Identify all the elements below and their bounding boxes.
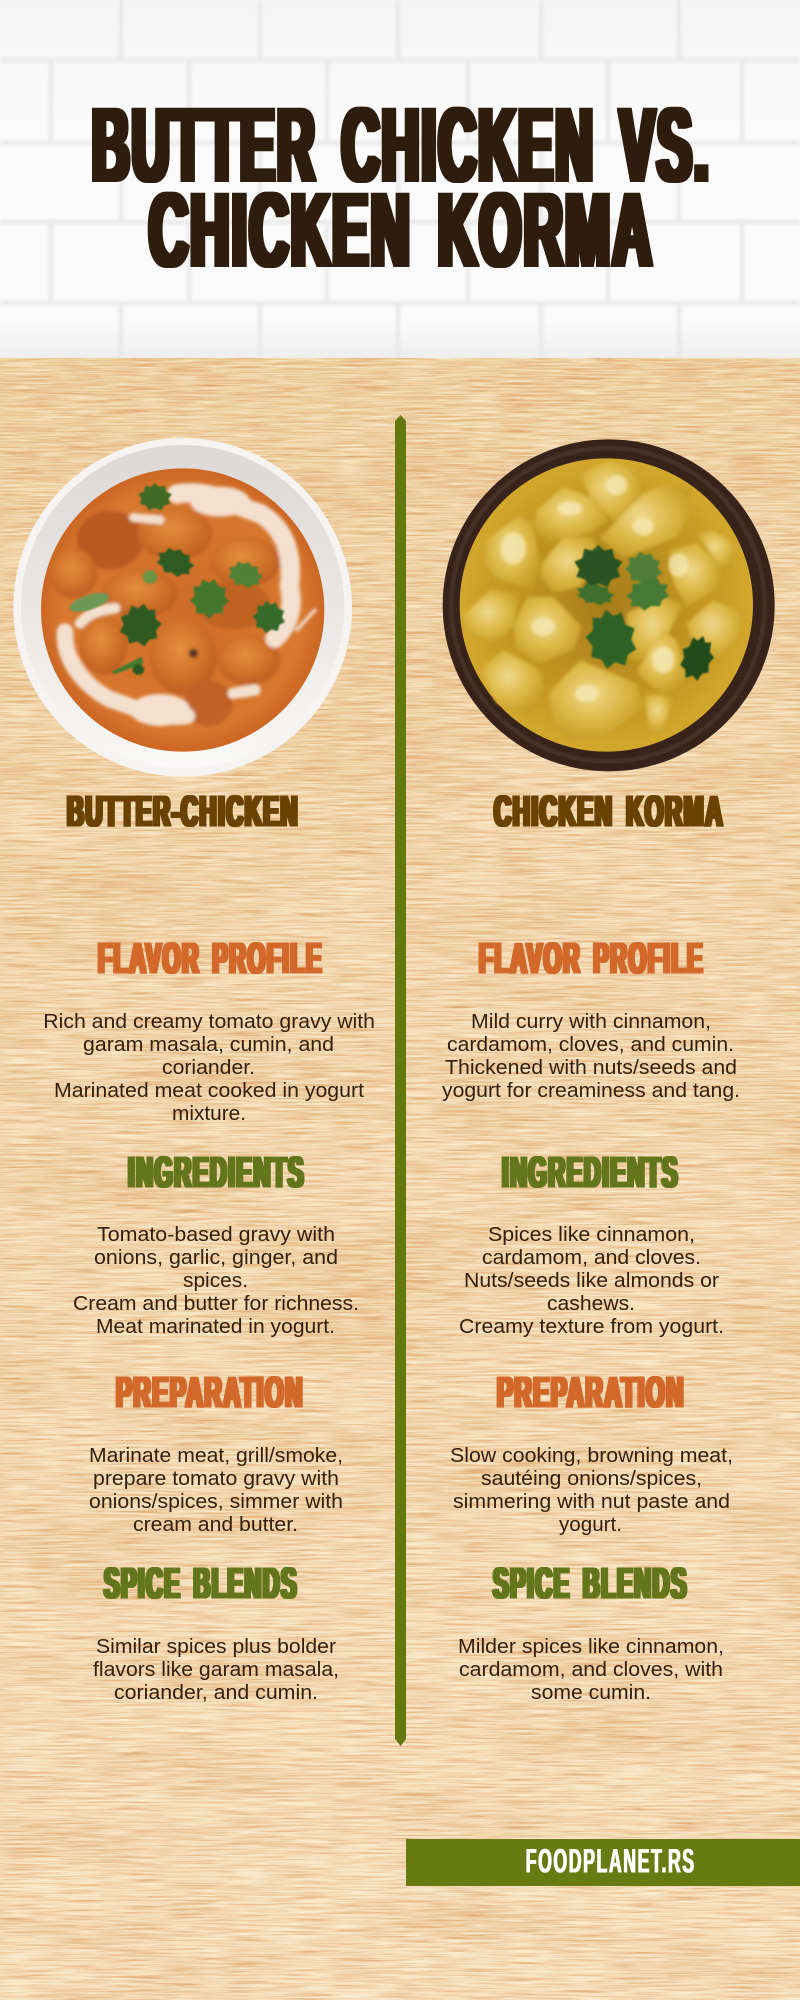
section: ingredients xyxy=(73,1148,359,1338)
section: ingredients: cashews. xyxy=(547,1293,635,1315)
section: preparation xyxy=(89,1368,343,1536)
section: preparation: yogurt. xyxy=(559,1514,622,1536)
section: spice blends: cardamom, and cloves, with xyxy=(459,1659,723,1681)
image: chicken korma bowl xyxy=(443,439,775,771)
section: flavor profile xyxy=(442,934,740,1102)
section: preparation: PREPARATION xyxy=(116,1368,304,1417)
section: preparation: simmering with nut paste and xyxy=(453,1491,730,1513)
image: butter chicken bowl xyxy=(13,438,352,777)
panel: chicken korma column xyxy=(442,439,775,1704)
section: spice blends: Similar spices plus bolder xyxy=(96,1636,336,1658)
section: ingredients: Creamy texture from yogurt. xyxy=(459,1316,724,1338)
section: spice blends: some cumin. xyxy=(531,1682,651,1704)
section: flavor profile: Rich and creamy tomato gravy with xyxy=(43,1011,375,1033)
section: flavor profile: Thickened with nuts/seeds and xyxy=(445,1057,737,1079)
section: flavor profile: FLAVOR PROFILE xyxy=(98,934,323,983)
section: preparation: onions/spices, simmer with xyxy=(89,1491,343,1513)
section: preparation: Slow cooking, browning meat, xyxy=(450,1445,733,1467)
heading: butter-chicken: BUTTER-CHICKEN xyxy=(67,787,299,836)
section: ingredients: Meat marinated in yogurt. xyxy=(96,1316,335,1338)
section: ingredients: Nuts/seeds like almonds or xyxy=(464,1270,719,1292)
section: flavor profile: garam masala, cumin, and xyxy=(83,1034,334,1056)
section: flavor profile: coriander. xyxy=(162,1057,255,1079)
centre divider bar xyxy=(395,415,406,1746)
section: spice blends: SPICE BLENDS xyxy=(104,1559,298,1608)
section: preparation: prepare tomato gravy with xyxy=(93,1468,339,1490)
section: spice blends xyxy=(93,1559,339,1704)
section: preparation: sautéing onions/spices, xyxy=(481,1468,702,1490)
section: ingredients xyxy=(459,1148,724,1338)
section: preparation xyxy=(450,1368,733,1536)
section: flavor profile: Mild curry with cinnamon, xyxy=(471,1011,711,1033)
section: preparation: cream and butter. xyxy=(133,1514,298,1536)
footer banner: foodplanet.rs xyxy=(406,1839,800,1886)
section: ingredients: Cream and butter for richness. xyxy=(73,1293,359,1315)
section: ingredients: Tomato-based gravy with xyxy=(97,1224,335,1246)
section: flavor profile xyxy=(43,934,375,1125)
section: spice blends: flavors like garam masala, xyxy=(93,1659,339,1681)
section: spice blends xyxy=(458,1559,724,1704)
section: flavor profile: mixture. xyxy=(172,1103,246,1125)
section: ingredients: onions, garlic, ginger, and xyxy=(94,1247,338,1269)
section: ingredients: INGREDIENTS xyxy=(128,1148,305,1197)
section: flavor profile: Marinated meat cooked in yogurt xyxy=(54,1080,364,1102)
white subway tile wall xyxy=(0,0,800,358)
section: preparation: Marinate meat, grill/smoke, xyxy=(89,1445,343,1467)
section: spice blends: Milder spices like cinnamon, xyxy=(458,1636,724,1658)
section: ingredients: spices. xyxy=(183,1270,248,1292)
section: flavor profile: yogurt for creaminess and tang. xyxy=(442,1080,740,1102)
panel: butter chicken column xyxy=(13,438,375,1704)
section: ingredients: cardamom, and cloves. xyxy=(482,1247,701,1269)
title xyxy=(92,87,711,289)
section: spice blends: coriander, and cumin. xyxy=(114,1682,318,1704)
section: flavor profile: cardamom, cloves, and cumin. xyxy=(447,1034,734,1056)
section: ingredients: Spices like cinnamon, xyxy=(488,1224,695,1246)
